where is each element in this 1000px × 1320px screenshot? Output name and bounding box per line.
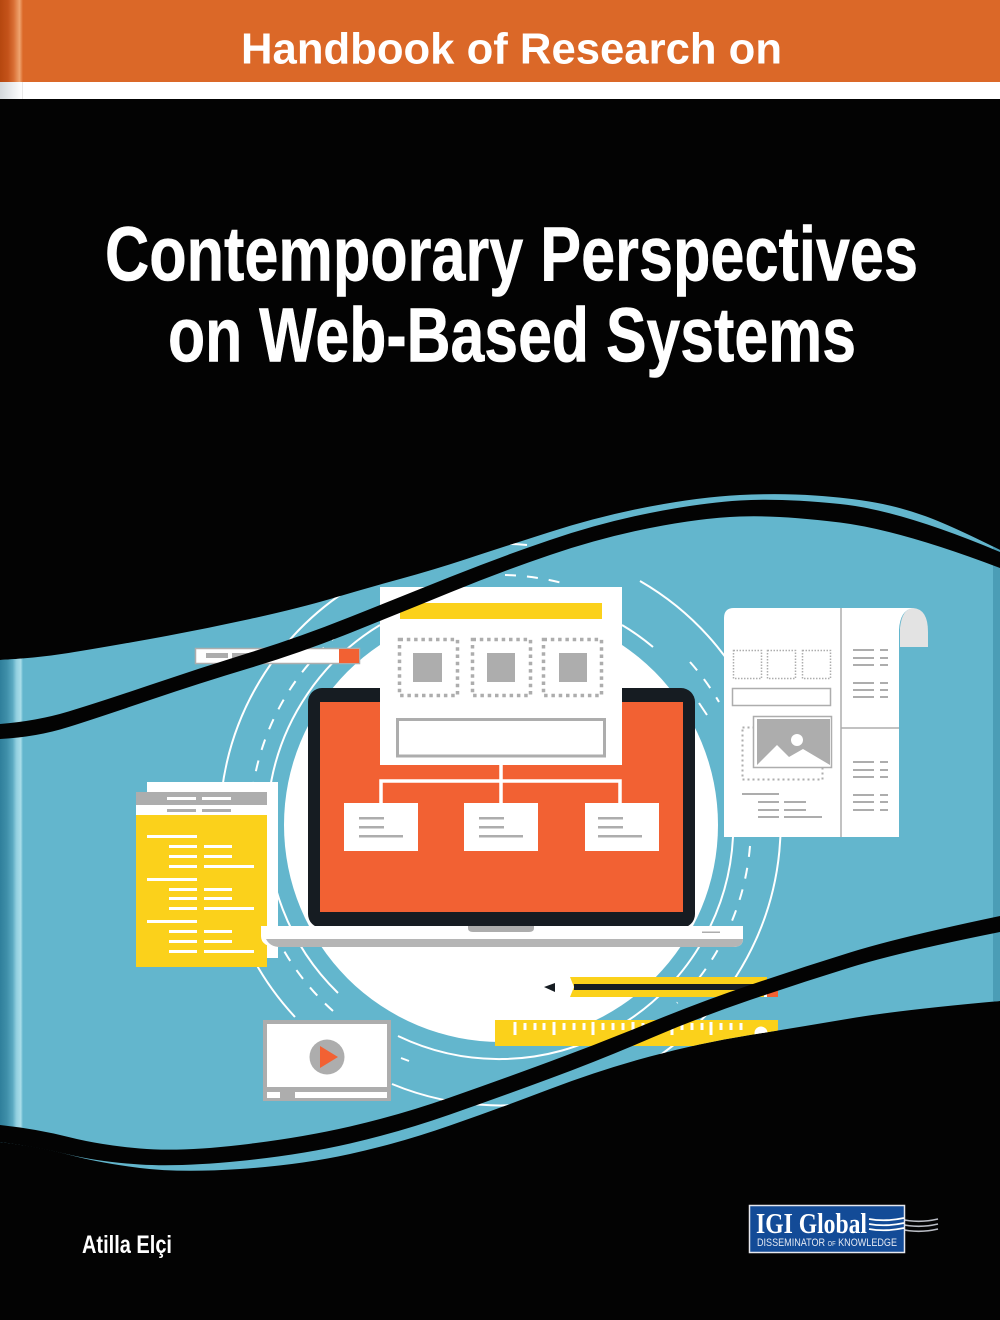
header band — [0, 0, 1000, 99]
laptop base shadow — [266, 939, 743, 947]
left spine — [0, 658, 23, 1146]
laptop base overlap on document — [261, 926, 300, 947]
grey title bar — [136, 792, 267, 805]
orange banner — [0, 0, 1000, 82]
connectors — [379, 765, 622, 803]
white circle — [284, 608, 718, 1042]
logo wordmark: IGI Global — [756, 1209, 867, 1240]
icon: ruler — [495, 1020, 778, 1046]
orange banner spine highlight — [0, 0, 23, 82]
icon: image placeholder — [754, 716, 832, 768]
org chart on screen — [344, 760, 659, 851]
org box left — [344, 803, 418, 851]
yellow page — [136, 815, 267, 967]
laptop screen — [320, 702, 683, 912]
dotted thumbnail 2 — [472, 640, 530, 696]
white stripe — [0, 82, 1000, 99]
author name: Atilla Elçi — [82, 1231, 172, 1259]
logo box — [750, 1206, 904, 1252]
icon: pencil — [544, 977, 778, 997]
dotted thumbnail 1 — [400, 640, 458, 696]
upper black wave band — [0, 500, 1000, 739]
icon: search bar — [196, 648, 360, 664]
icon: video player — [263, 1020, 391, 1101]
series title: Handbook of Research on — [241, 24, 782, 74]
white sub bar — [136, 805, 267, 815]
code document — [136, 782, 278, 967]
lower black wave band — [0, 916, 1000, 1165]
title bar dashes — [167, 797, 231, 812]
waves outside logo — [900, 1219, 938, 1231]
caption lines — [742, 793, 822, 818]
waves inside logo — [869, 1218, 904, 1230]
column text upper — [853, 649, 888, 698]
laptop notch — [468, 926, 534, 932]
right spine edge — [993, 546, 1000, 1002]
org box right — [585, 803, 659, 851]
laptop frame — [308, 688, 695, 928]
yellow header bar — [400, 603, 602, 619]
blue field — [0, 480, 1000, 1200]
page sheet — [380, 587, 622, 765]
back sheet — [147, 782, 278, 958]
logo tagline: DISSEMINATOR OF KNOWLEDGE — [757, 1237, 897, 1249]
input box — [732, 688, 830, 706]
wide input box — [398, 720, 604, 756]
scroll sheet — [724, 608, 913, 837]
illustration panel: blue wave — [0, 480, 1000, 1200]
main title — [105, 212, 918, 378]
white stripe spine shading — [0, 82, 23, 99]
laptop — [261, 688, 743, 947]
publisher logo — [750, 1206, 938, 1252]
dotted thumbnail 3 — [544, 640, 602, 696]
org box centre — [464, 803, 538, 851]
column text lower — [853, 761, 888, 811]
orbit road lines — [220, 544, 781, 1105]
web page mockup — [380, 587, 622, 765]
document scroll — [724, 608, 928, 837]
laptop indicator — [702, 932, 720, 933]
laptop base — [261, 926, 743, 947]
dotted boxes — [734, 650, 830, 678]
scroll curl — [900, 608, 928, 647]
dotted image frame — [742, 728, 822, 780]
code lines — [147, 835, 254, 953]
laptop base overlap shadow — [266, 939, 300, 947]
scroll dividers — [841, 608, 899, 837]
